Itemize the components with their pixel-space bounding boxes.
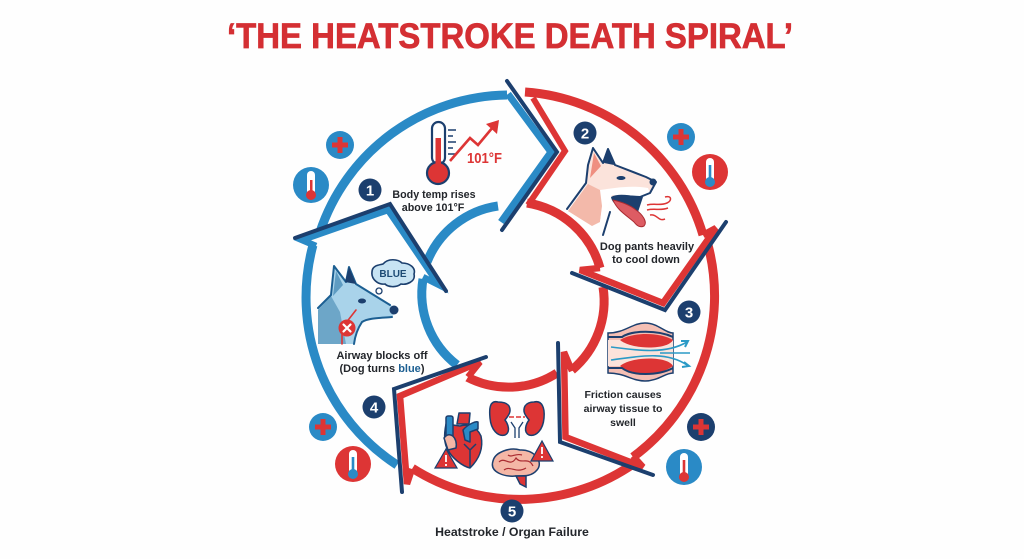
step number 2 bbox=[574, 122, 596, 144]
caption bbox=[600, 241, 695, 266]
caption: Body temp rises bbox=[392, 189, 476, 201]
step number 5: 5 bbox=[508, 504, 516, 520]
icon: breath lines bbox=[647, 197, 671, 220]
caption: Friction causes bbox=[584, 389, 662, 401]
caption: airway tissue to bbox=[584, 403, 662, 415]
side icons top left bbox=[293, 131, 354, 203]
icon: panting dog bbox=[567, 148, 656, 235]
icon: heart bbox=[444, 413, 482, 468]
step number 2: 2 bbox=[581, 126, 589, 142]
caption: Heatstroke / Organ Failure bbox=[435, 525, 589, 539]
icon: brain bbox=[492, 449, 539, 487]
icon: plus bbox=[326, 131, 354, 159]
101°F label: 101°F bbox=[467, 151, 502, 167]
arrow 5: red bbox=[394, 357, 636, 499]
step number 1: 1 bbox=[366, 182, 374, 200]
arrow 3: red bbox=[558, 245, 715, 475]
icon: plus bbox=[309, 413, 337, 441]
arrow 2: red bbox=[525, 92, 726, 310]
side icons bottom right bbox=[666, 413, 715, 485]
arrow 1 head: blue bbox=[501, 81, 557, 230]
caption bbox=[392, 189, 476, 214]
icon: kidneys bbox=[490, 402, 544, 438]
step number 3: 3 bbox=[685, 304, 693, 322]
side icons top right bbox=[667, 123, 728, 190]
icon: plus bbox=[687, 413, 715, 441]
step 1: body temperature bbox=[358, 120, 502, 214]
caption: to cool down bbox=[612, 254, 680, 266]
caption bbox=[584, 389, 662, 429]
icon: thermometer bbox=[335, 446, 371, 482]
caption: (Dog turns blue) bbox=[340, 363, 425, 375]
title: ‘THE HEATSTROKE DEATH SPIRAL’ bbox=[227, 17, 793, 56]
arrow 1 tail: blue bbox=[320, 95, 507, 262]
panel: cycle arrows bbox=[295, 81, 726, 499]
step number 1 bbox=[358, 178, 382, 202]
arrow 4: blue bbox=[295, 204, 457, 465]
step 3: swelling airway bbox=[584, 300, 700, 429]
icon: blue dog bbox=[318, 266, 398, 344]
step 5: organ failure bbox=[435, 402, 589, 539]
step number 4: 4 bbox=[370, 400, 379, 416]
side icons bottom left bbox=[309, 413, 371, 482]
step number 5 bbox=[500, 500, 524, 522]
caption: swell bbox=[610, 417, 636, 429]
icon: swollen airway bbox=[608, 323, 673, 381]
caption: above 101°F bbox=[402, 202, 465, 214]
step number 4 bbox=[362, 396, 386, 418]
icon: air flow arrows bbox=[611, 341, 690, 367]
caption bbox=[336, 350, 428, 375]
icon: warning heart bbox=[435, 449, 457, 468]
icon: thermometer bbox=[293, 167, 329, 203]
caption: Dog pants heavily bbox=[600, 241, 695, 253]
step 2: dog panting bbox=[567, 122, 695, 266]
step 4: airway block bbox=[318, 260, 428, 418]
thought bubble: BLUE bbox=[379, 269, 407, 280]
icon: thermometer bbox=[427, 122, 456, 184]
caption: Airway blocks off bbox=[336, 350, 428, 362]
icon: plus bbox=[667, 123, 695, 151]
icon: rising arrow bbox=[450, 120, 499, 161]
icon: thermometer bbox=[666, 449, 702, 485]
icon: warning brain bbox=[531, 441, 553, 461]
thought bubble bbox=[372, 260, 414, 294]
icon: thermometer bbox=[692, 154, 728, 190]
